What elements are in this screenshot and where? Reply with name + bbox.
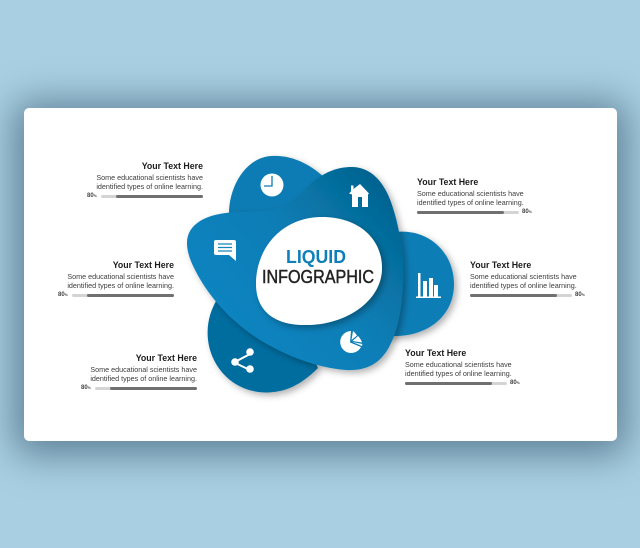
text block: middle left: 80%: [58, 292, 68, 298]
text block: bottom right: Your Text Here: [405, 348, 466, 358]
text block: top right: 80%: [522, 209, 532, 215]
text block: middle left: Some educational scientists have: [67, 272, 174, 280]
title: [262, 246, 374, 287]
text block: top right: [417, 176, 532, 215]
text block: bottom left: Some educational scientists have: [90, 364, 197, 374]
text block: middle right: Some educational scientists have: [470, 272, 577, 280]
petal: main body with home: [187, 167, 403, 370]
text block: middle right: Your Text Here: [470, 260, 531, 270]
petal: chart: [380, 232, 454, 336]
text block: top right: Some educational scientists have: [417, 188, 524, 198]
icon: bar chart: [416, 273, 441, 298]
text block: bottom right: [405, 348, 520, 386]
text block: middle left: identified types of online learning.: [67, 280, 174, 290]
text block: top left: 80%: [87, 193, 97, 199]
icon: pie chart: [340, 331, 362, 353]
text block: top right: Your Text Here: [417, 176, 478, 186]
text block: top left: identified types of online learning.: [96, 182, 203, 190]
text block: middle right: identified types of online learning.: [470, 280, 577, 290]
text block: top left: Your Text Here: [142, 160, 203, 170]
text block: bottom right: Some educational scientists have: [405, 360, 512, 368]
icon: share: [231, 348, 254, 373]
text block: top left: [87, 160, 203, 199]
text block: middle right: [470, 260, 585, 298]
title: INFOGRAPHIC: [262, 267, 374, 287]
text block: bottom left: [81, 352, 197, 391]
text block: bottom left: 80%: [81, 385, 91, 391]
text block: bottom left: Your Text Here: [136, 352, 197, 362]
petal: share: [208, 290, 318, 392]
text block: bottom right: identified types of online learning.: [405, 368, 512, 378]
slide card: [24, 108, 617, 441]
icon: home: [349, 184, 369, 207]
center blob: [256, 217, 382, 325]
text block: middle left: [58, 260, 174, 298]
icon: speech bubble: [214, 240, 236, 261]
text block: bottom right: 80%: [510, 380, 520, 386]
text block: top left: Some educational scientists have: [96, 172, 203, 182]
petal: clock: [229, 156, 330, 215]
text block: bottom left: identified types of online learning.: [90, 374, 197, 382]
title: LIQUID: [286, 246, 346, 267]
text block: top right: identified types of online learning.: [417, 198, 524, 206]
text block: middle right: 80%: [575, 292, 585, 298]
icon: clock: [260, 174, 284, 196]
text block: middle left: Your Text Here: [113, 260, 174, 270]
